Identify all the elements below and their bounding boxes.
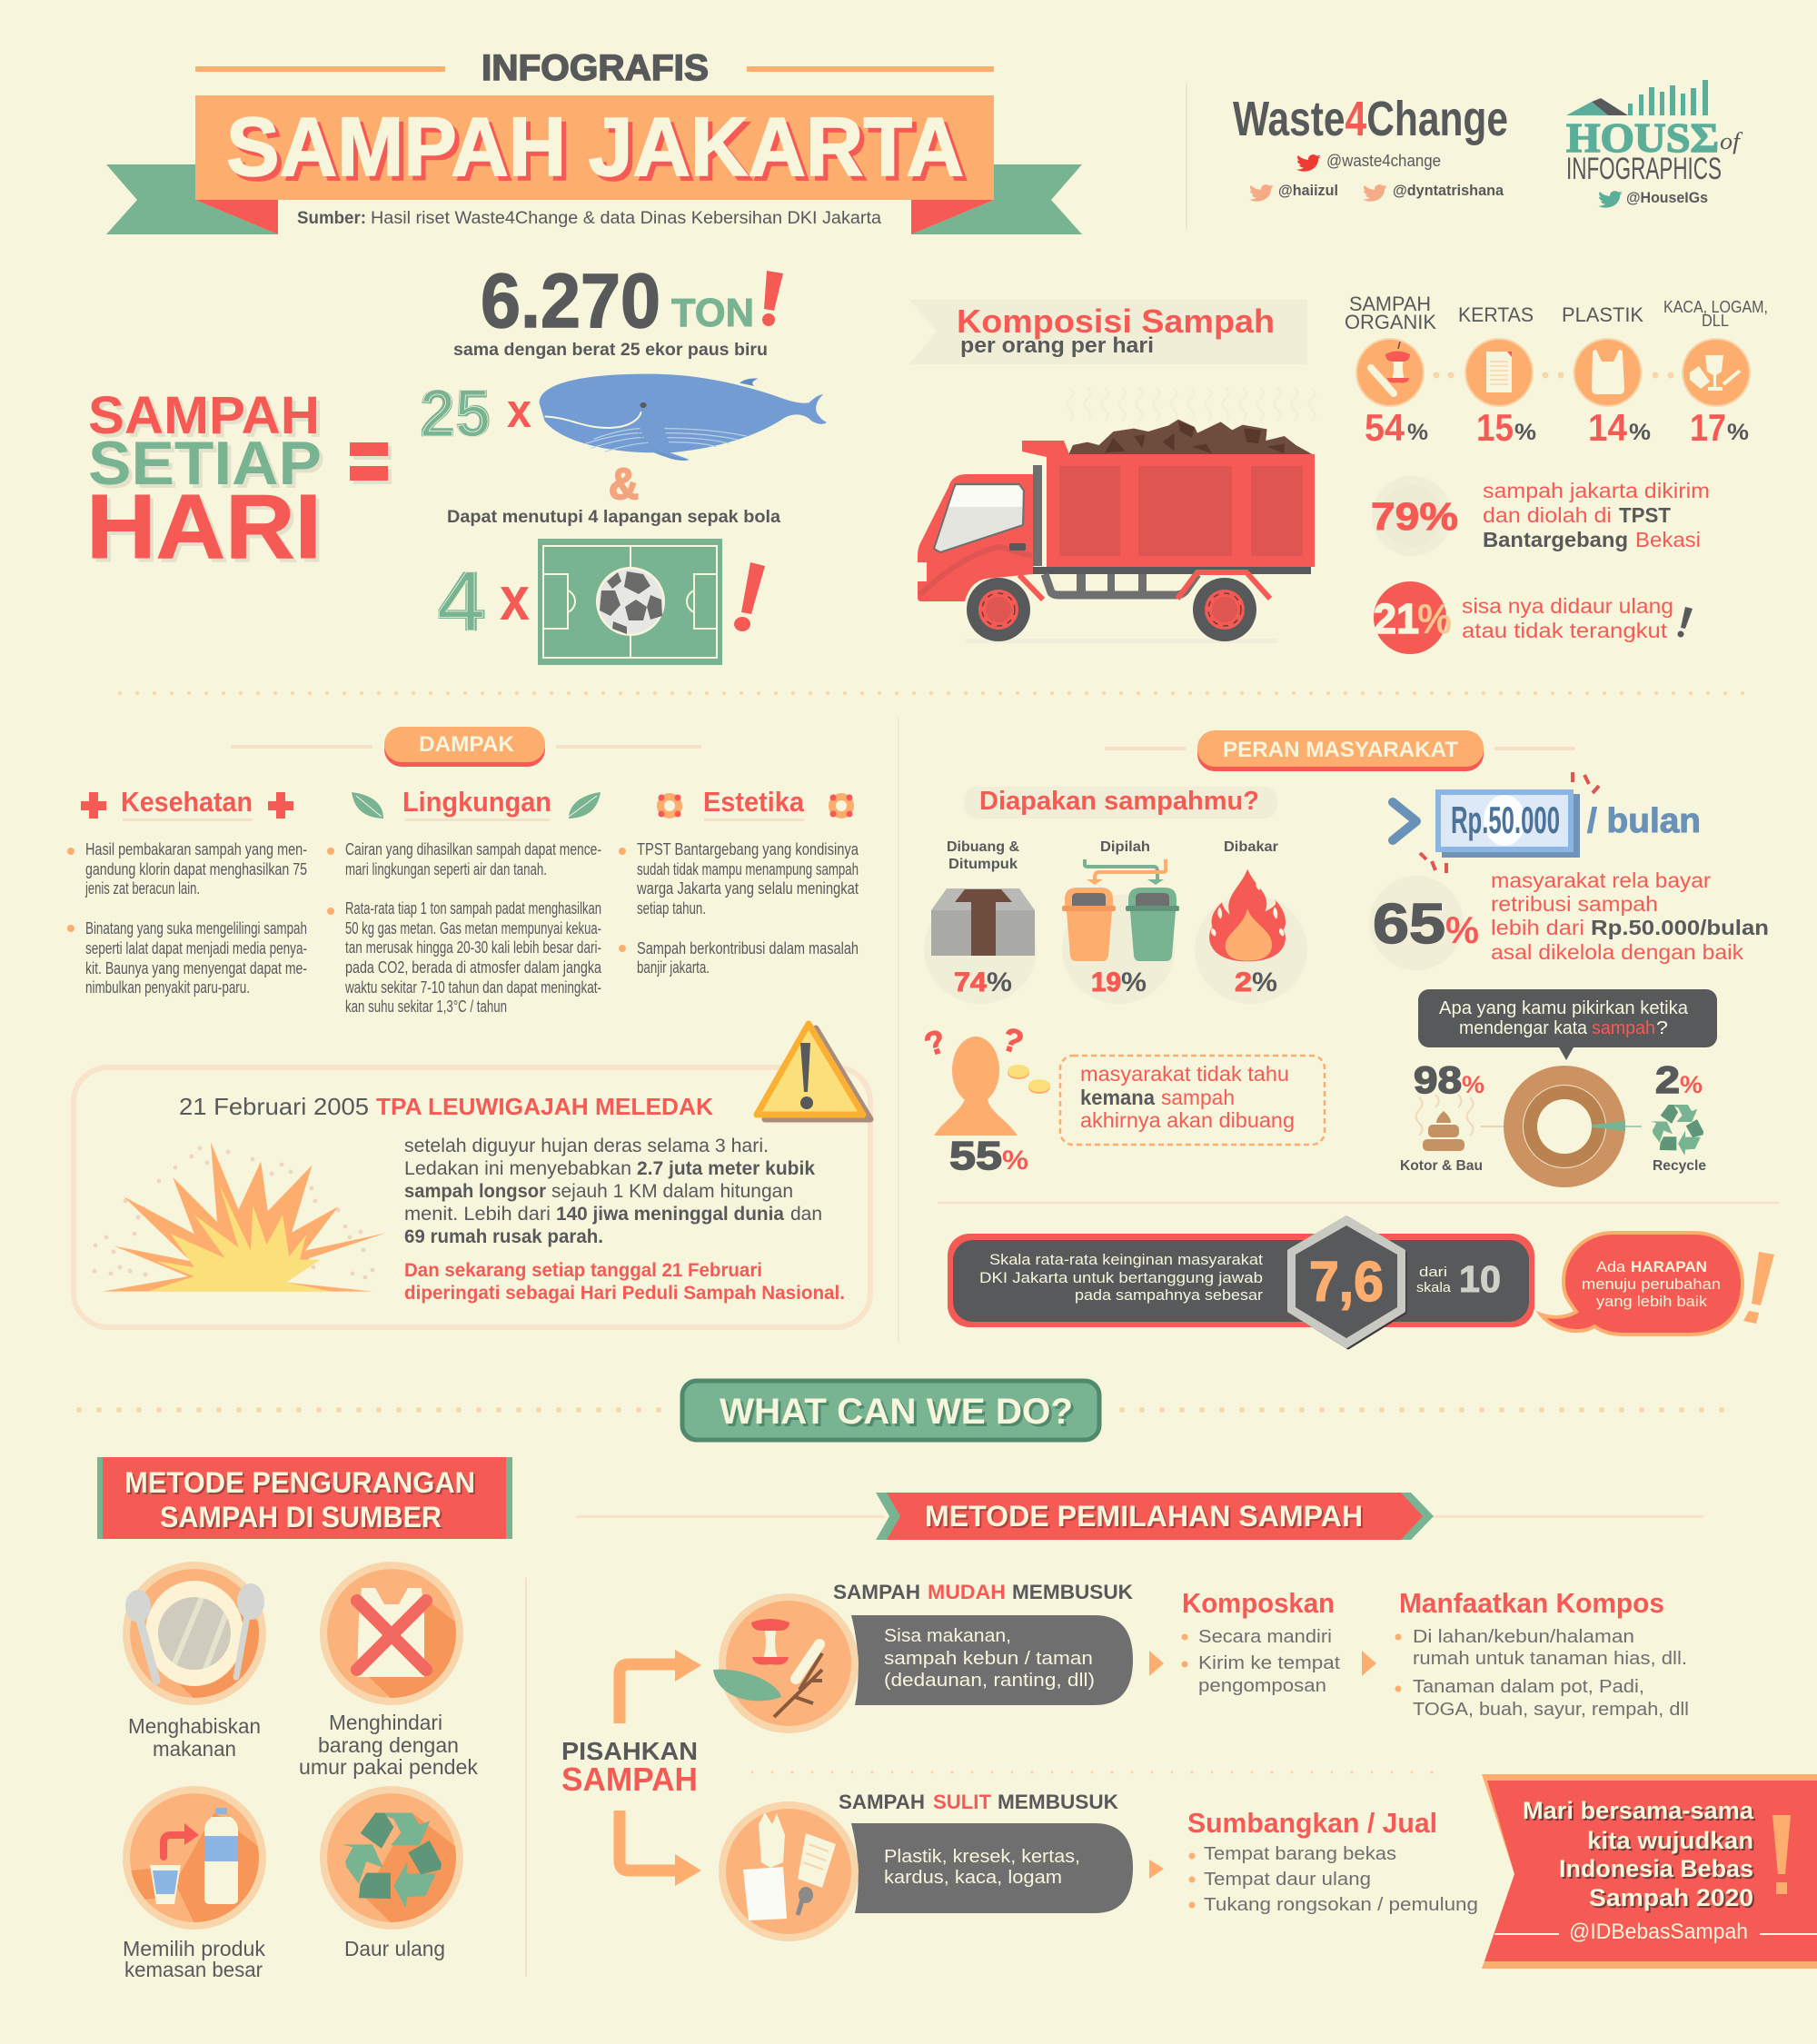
column: Lingkungan: tan merusak hingga 20-30 kali lebih besar dari- [345, 938, 601, 957]
stat: 65%: retribusi sampah [1491, 892, 1658, 916]
football field comparison [437, 539, 765, 665]
group: sumbangkan atau jual: Sumbangkan / Jual [1187, 1807, 1437, 1839]
pill: description [851, 1615, 1133, 1705]
ribbon left [106, 164, 278, 234]
label: Pisahkan sampah with arrows: PISAHKAN [561, 1737, 698, 1765]
icon: person with question marks: ? [919, 1022, 950, 1064]
icon: recycle [320, 1786, 464, 1930]
group: sumbangkan atau jual: Tempat daur ulang [1204, 1870, 1371, 1890]
speech bubble: harapan: yang lebih baik [1596, 1293, 1708, 1310]
column: Estetika: TPST Bantargebang yang kondisinya [637, 840, 859, 858]
stat: 6.270 ton [453, 258, 783, 360]
narrative text: 140 jiwa meninggal dunia [556, 1204, 784, 1225]
narrative text: sampah longsor [404, 1181, 546, 1202]
stat: 21%: 21 [1374, 595, 1419, 642]
column: Estetika: setiap tahun. [637, 899, 706, 918]
group: sumbangkan atau jual: Tukang rongsokan / pemulung [1204, 1895, 1478, 1915]
narrative text: setelah diguyur hujan deras selama 3 hari. [404, 1136, 769, 1156]
icon: football field [538, 539, 722, 665]
heading: Diapakan sampahmu: Diapakan sampahmu? [979, 787, 1259, 816]
heading: What can we do [682, 1381, 1099, 1440]
composition: kaca, logam, dll [1663, 298, 1768, 449]
whale comparison [420, 374, 827, 461]
group: komposkan: Secara mandiri [1198, 1627, 1332, 1647]
score bar: 7,6 dari skala 10: skala [1416, 1280, 1452, 1295]
composition: plastik: PLASTIK [1562, 303, 1643, 326]
group: komposkan: Kirim ke tempat [1198, 1653, 1340, 1673]
section header: Dampak [231, 727, 701, 767]
heading: Metode pemilahan [576, 1493, 1703, 1540]
group: sampah mudah membusuk: MUDAH [928, 1581, 1006, 1603]
score bar: 7,6 dari skala 10: pada sampahnya sebesar [1075, 1286, 1263, 1304]
speech bubble: harapan [1541, 1233, 1774, 1335]
composition: kaca, logam, dll: % [1727, 420, 1749, 445]
callout: kemana [1080, 1086, 1155, 1109]
arrow down to sulit membusuk [620, 1811, 701, 1886]
headline: Sampah setiap hari: HARI [86, 476, 322, 578]
heading: TPA LEUWIGAJAH MELEDAK [376, 1093, 713, 1120]
option: dibuang dan ditumpuk: % [987, 967, 1012, 997]
source line: Hasil riset Waste4Change & data Dinas Kebersihan DKI Jakarta [371, 209, 881, 228]
composition: sampah organik [1345, 293, 1436, 449]
whale comparison: 25 [420, 377, 491, 451]
kicker: INFOGRAFIS: INFOGRAFIS [482, 48, 709, 88]
method: kemasan besar [122, 1786, 267, 1981]
column: Lingkungan: pada CO2, berada di atmosfer dalam jangka [345, 958, 602, 977]
option: dibuang dan ditumpuk: Dibuang & [947, 839, 1019, 855]
ampersand: & [609, 461, 639, 509]
method: menghindari barang umur pendek: umur pakai pendek [299, 1755, 479, 1779]
label: 98%: 98 [1414, 1058, 1462, 1101]
icon: explosion [94, 1142, 386, 1292]
stat: 79% [1371, 476, 1710, 556]
composition: kertas: KERTAS [1458, 303, 1534, 326]
stat: 65%: lebih dari [1491, 916, 1584, 939]
method: menghindari barang umur pendek: barang dengan [318, 1733, 459, 1757]
group: manfaatkan kompos: Manfaatkan Kompos [1399, 1587, 1664, 1619]
stat: 79%: 79% [1371, 495, 1458, 539]
call to action banner: Indonesia Bebas [1559, 1855, 1753, 1882]
stat: 21%: % [1417, 595, 1452, 642]
stat: 79%: sampah jakarta dikirim [1483, 479, 1710, 502]
option: dipilah: Dipilah [1100, 839, 1150, 855]
money willingness: Rp.50.000 per bulan: / bulan [1587, 802, 1701, 840]
speech bubble: harapan: Ada [1596, 1258, 1626, 1275]
donut chart: kotor dan bau vs recycle: Kotor & Bau [1400, 1158, 1483, 1174]
callout [1060, 1056, 1325, 1145]
football field comparison: x [500, 564, 530, 633]
pill: description: sampah kebun / taman [884, 1649, 1093, 1669]
heading: Metode pemilahan: METODE PEMILAHAN SAMPAH [925, 1500, 1363, 1533]
icon: medical crosses [81, 792, 293, 819]
heading: Metode pengurangan [97, 1457, 512, 1539]
stat: 6.270 ton: sama dengan berat 25 ekor paus biru [453, 341, 768, 360]
icon: green bin [1126, 888, 1179, 961]
heading: Metode pengurangan: SAMPAH DI SUMBER [160, 1501, 442, 1533]
composition: kertas: 15 [1476, 406, 1514, 449]
column: Estetika: banjir jakarta. [637, 958, 710, 977]
wheels [967, 578, 1256, 641]
logo: House of Infographics: HOUSΣ [1566, 114, 1719, 161]
stat: 65%: asal dikelola dengan baik [1491, 940, 1744, 964]
column: Estetika: warga Jakarta yang selalu meningkat [636, 879, 859, 898]
stat: 21%: atau tidak terangkut [1462, 619, 1668, 642]
column: Kesehatan [67, 786, 307, 997]
composition: plastik: % [1629, 420, 1651, 445]
composition: plastik [1562, 303, 1651, 449]
group: sampah sulit membusuk: MEMBUSUK [998, 1791, 1118, 1813]
icon: inorganic waste circle [719, 1801, 859, 1941]
heading: 21 Februari 2005 [179, 1093, 369, 1120]
narrative text: 2.7 juta meter kubik [637, 1158, 815, 1179]
label: 2%: 2 [1655, 1058, 1680, 1101]
speech bubble: question: ? [1656, 1018, 1668, 1038]
callout: sampah [1161, 1086, 1235, 1109]
stat: 65%: masyarakat rela bayar [1491, 868, 1711, 892]
group: sampah mudah membusuk: MEMBUSUK [1012, 1581, 1133, 1603]
column: Kesehatan: Kesehatan [121, 786, 253, 818]
stat: 79%: Bantargebang [1483, 528, 1628, 551]
stat: 79%: dan diolah di [1483, 503, 1612, 527]
label: 2%: % [1680, 1071, 1703, 1098]
football field comparison: 4 [437, 553, 485, 649]
logo: House of Infographics [1566, 80, 1743, 208]
title banner [106, 48, 1082, 234]
speech bubble: question [1418, 989, 1717, 1060]
composition: sampah organik: ORGANIK [1345, 311, 1436, 333]
column: Lingkungan: Cairan yang dihasilkan sampah dapat mence- [345, 840, 601, 858]
headline: Sampah setiap hari: SAMPAH [88, 386, 320, 445]
logo: Waste4Change with handles: @waste4change [1326, 152, 1441, 170]
label: Pisahkan sampah with arrows [561, 1650, 701, 1886]
icon: orange bin [1062, 888, 1116, 961]
call to action banner: @IDBebasSampah [1569, 1920, 1748, 1944]
icon: organic waste circle [713, 1593, 859, 1733]
logo: Waste4Change with handles: @dyntatrishana [1393, 182, 1504, 199]
icon: poop with stink [1415, 1095, 1474, 1151]
field caption: Dapat menutupi 4 lapangan sepak bola [447, 508, 780, 527]
speech bubble: question: sampah [1592, 1018, 1655, 1038]
composition: kertas: % [1514, 420, 1536, 445]
icon: flowers [657, 793, 854, 819]
speech bubble: harapan: menuju perubahan [1582, 1275, 1721, 1293]
group: manfaatkan kompos [1395, 1587, 1689, 1720]
headline: Sampah setiap hari: SETIAP [88, 429, 322, 498]
icon: plate and cutlery [123, 1562, 267, 1705]
column: Kesehatan: gandung klorin dapat menghasilkan 75 [85, 860, 307, 878]
column: Estetika: Estetika [703, 786, 805, 818]
score bar: 7,6 dari skala 10: dari [1419, 1265, 1447, 1280]
stat: 6.270 ton: 6.270 [481, 258, 660, 343]
speech bubble: question: Apa yang kamu pikirkan ketika [1439, 998, 1689, 1018]
heading: Komposisi Sampah: Komposisi Sampah [957, 303, 1275, 340]
hexagon badge: 7,6 [1309, 1251, 1384, 1314]
group: sampah mudah membusuk [713, 1581, 1164, 1733]
method: daur ulang: Daur ulang [344, 1937, 445, 1960]
whale comparison: x [507, 384, 531, 438]
score bar: 7,6 dari skala 10: Skala rata-rata keinginan masyarakat [989, 1251, 1263, 1268]
icon: warning triangle [757, 1024, 870, 1119]
label: 2% [1655, 1058, 1703, 1101]
group: manfaatkan kompos: Tanaman dalam pot, Padi, [1413, 1677, 1644, 1697]
option: dipilah: % [1121, 967, 1147, 997]
section header: Peran Masyarakat [1105, 730, 1575, 771]
stat: 65%: 65 [1373, 893, 1445, 956]
icon: leaves [352, 792, 601, 819]
icon: person with question marks [919, 1019, 1050, 1136]
group: manfaatkan kompos: Di lahan/kebun/halaman [1413, 1627, 1634, 1647]
composition: kaca, logam, dll: DLL [1702, 312, 1729, 330]
pill: description: Sisa makanan, [884, 1626, 1011, 1646]
column: Lingkungan: waktu sekitar 7-10 tahun dan dapat meningkat- [344, 978, 601, 997]
column: Lingkungan: kan suhu sekitar 1,3°C / tahun [345, 997, 507, 1016]
composition: sampah organik: 54 [1365, 406, 1405, 449]
score bar: 7,6 dari skala 10: DKI Jakarta untuk bertanggung jawab [979, 1269, 1263, 1286]
pill: description: Plastik, kresek, kertas, [884, 1847, 1080, 1867]
stat: 6.270 ton: TON [671, 291, 754, 335]
option: dibakar: % [1252, 967, 1277, 997]
headline: Sampah setiap hari [86, 386, 388, 578]
narrative text: dan [790, 1204, 822, 1225]
composition: kertas [1458, 303, 1536, 449]
composition: sampah organik: % [1407, 420, 1428, 445]
column: Kesehatan: Binatang yang suka mengelilingi sampah [85, 919, 307, 938]
group: manfaatkan kompos: TOGA, buah, sayur, rempah, dll [1413, 1700, 1689, 1720]
column: Lingkungan: Lingkungan [402, 786, 551, 818]
narrative text: Ledakan ini menyebabkan [404, 1158, 631, 1179]
stat: 65%: % [1445, 908, 1479, 951]
method: menghabiskan makanan: Menghabiskan [128, 1714, 261, 1738]
section header: Peran Masyarakat: PERAN MASYARAKAT [1223, 738, 1458, 762]
pill: description [851, 1823, 1133, 1913]
stat: 55% confused person [919, 1019, 1325, 1178]
group: sumbangkan atau jual: Tempat barang bekas [1204, 1844, 1396, 1864]
column: Estetika: sudah tidak mampu menampung sampah [637, 860, 859, 878]
source line: Sumber: [297, 209, 366, 228]
label: 98%: % [1462, 1071, 1484, 1098]
composition: sampah organik: SAMPAH [1349, 293, 1431, 315]
icon: cup to bottle [122, 1786, 267, 1930]
heading: What can we do: WHAT CAN WE DO? [720, 1392, 1073, 1432]
column: Kesehatan: Hasil pembakaran sampah yang men- [85, 840, 307, 858]
football field comparison: 4 [437, 553, 485, 649]
narrative text: diperingati sebagai Hari Peduli Sampah Nasional. [404, 1283, 845, 1304]
narrative text [404, 1136, 845, 1304]
speech bubble: harapan: HARAPAN [1631, 1258, 1707, 1275]
narrative text: menit. Lebih dari [404, 1204, 551, 1225]
column: Estetika: Sampah berkontribusi dalam masalah [637, 939, 859, 958]
column: Lingkungan: 50 kg gas metan. Gas metan mempunyai kekua- [345, 919, 601, 938]
group: komposkan: pengomposan [1198, 1676, 1326, 1696]
column: Estetika [619, 786, 859, 977]
stat: 65% [1369, 868, 1769, 970]
logo: Waste4Change with handles: @haiizul [1278, 182, 1338, 199]
truck illustration [918, 420, 1315, 643]
group: sampah sulit membusuk [719, 1791, 1164, 1941]
donut chart: kotor dan bau vs recycle: Recycle [1653, 1158, 1706, 1174]
group: komposkan [1181, 1587, 1340, 1696]
truck cab [918, 474, 1033, 601]
whale comparison: 25 [420, 377, 491, 451]
column: Kesehatan: kit. Baunya yang menyengat dapat me- [85, 959, 307, 977]
method: menghindari barang umur pendek [299, 1562, 479, 1779]
call to action banner: kita wujudkan [1587, 1827, 1753, 1854]
method: menghabiskan makanan [123, 1562, 267, 1761]
stat: 21%: sisa nya didaur ulang [1462, 594, 1673, 618]
ribbon right [911, 164, 1082, 234]
money willingness: Rp.50.000 per bulan [1393, 772, 1701, 873]
heading [179, 1093, 713, 1120]
pill: description: (dedaunan, ranting, dll) [884, 1671, 1095, 1691]
stat: 65%: Rp.50.000/bulan [1591, 916, 1769, 939]
option: dipilah [1062, 839, 1179, 1004]
narrative text: 69 rumah rusak parah. [404, 1226, 603, 1247]
score bar: 7,6 dari skala 10 [948, 1217, 1534, 1348]
composition: plastik: 14 [1588, 406, 1628, 449]
logo: Waste4Change with handles: Waste4Change [1233, 92, 1508, 146]
logo: House of Infographics: @HouseIGs [1626, 189, 1708, 206]
stat: 79%: TPST [1619, 503, 1671, 527]
load of garbage [1068, 420, 1312, 454]
column: Lingkungan: mari lingkungan seperti air dan tanah. [345, 860, 547, 878]
group: sumbangkan atau jual [1187, 1807, 1478, 1915]
money willingness: Rp.50.000 per bulan: Rp.50.000 [1451, 799, 1560, 841]
call to action banner: Sampah 2020 [1589, 1884, 1753, 1911]
option: dibuang dan ditumpuk [924, 839, 1037, 1004]
narrative text: sejauh 1 KM dalam hitungan [551, 1181, 793, 1202]
option: dibuang dan ditumpuk: 74 [954, 967, 987, 997]
label: 98% [1414, 1058, 1484, 1101]
icon: small recycle [1651, 1105, 1703, 1156]
method: daur ulang [320, 1786, 464, 1960]
logo: House of Infographics: of [1720, 128, 1743, 154]
logo: House of Infographics: INFOGRAPHICS [1566, 152, 1722, 186]
option: dibuang dan ditumpuk: Ditumpuk [948, 857, 1018, 872]
pill: description: kardus, kaca, logam [884, 1868, 1062, 1888]
main title: SAMPAH JAKARTA [226, 101, 964, 193]
donut chart: kotor dan bau vs recycle [1400, 1058, 1706, 1187]
callout: masyarakat tidak tahu [1080, 1062, 1289, 1086]
column: Lingkungan [327, 786, 602, 1016]
icon: person with question marks: ? [998, 1019, 1028, 1061]
arrow up to mudah membusuk [620, 1650, 701, 1723]
section header: Dampak: DAMPAK [419, 732, 515, 757]
group: sampah sulit membusuk: SULIT [933, 1791, 992, 1813]
heading: Komposisi Sampah [909, 300, 1307, 364]
group: komposkan: Komposkan [1182, 1587, 1335, 1619]
method: menghabiskan makanan: makanan [153, 1737, 236, 1761]
option: dipilah: 19 [1091, 967, 1121, 997]
heading: Metode pengurangan: METODE PENGURANGAN [124, 1466, 475, 1499]
hexagon badge [1289, 1217, 1405, 1348]
label: Pisahkan sampah with arrows: SAMPAH [561, 1761, 698, 1798]
heading: Komposisi Sampah: per orang per hari [960, 333, 1154, 358]
group: manfaatkan kompos: rumah untuk tanaman hias, dll. [1413, 1649, 1687, 1669]
stat: 21% [1374, 581, 1693, 654]
icon: crossed plastic bag [320, 1562, 464, 1705]
logo: Waste4Change with handles [1233, 92, 1508, 202]
column: Kesehatan: nimbulkan penyakit paru-paru. [85, 978, 250, 997]
stat: 79%: Bekasi [1635, 528, 1701, 551]
method: kemasan besar: kemasan besar [124, 1958, 263, 1981]
option: dibakar: Dibakar [1224, 839, 1278, 855]
icon: blue whale [540, 374, 827, 461]
group: sampah mudah membusuk: SAMPAH [833, 1581, 920, 1603]
composition: kaca, logam, dll: KACA, LOGAM, [1663, 298, 1768, 316]
method: kemasan besar: Memilih produk [123, 1937, 265, 1960]
composition: kaca, logam, dll: 17 [1690, 406, 1726, 449]
column: Kesehatan: jenis zat beracun lain. [84, 879, 200, 898]
panel: TPA Leuwigajah explosion [74, 1024, 870, 1327]
group: sampah sulit membusuk: SAMPAH [839, 1791, 925, 1813]
option: dibakar [1195, 839, 1307, 1004]
call to action banner [1482, 1774, 1817, 1969]
speech bubble: question: mendengar kata [1459, 1018, 1588, 1038]
method: menghindari barang umur pendek: Menghindari [329, 1711, 442, 1734]
column: Lingkungan: Rata-rata tiap 1 ton sampah padat menghasilkan [345, 899, 601, 918]
option: dibakar: 2 [1235, 967, 1252, 997]
narrative text: Dan sekarang setiap tanggal 21 Februari [404, 1260, 762, 1281]
stat: 55% confused person: 55 [949, 1134, 1002, 1178]
score bar: 7,6 dari skala 10: 10 [1459, 1258, 1501, 1300]
stat: 55% confused person: % [1002, 1146, 1028, 1176]
column: Kesehatan: seperti lalat dapat menjadi media penya- [85, 939, 307, 958]
callout: akhirnya akan dibuang [1080, 1108, 1295, 1132]
call to action banner: Mari bersama-sama [1523, 1797, 1754, 1824]
